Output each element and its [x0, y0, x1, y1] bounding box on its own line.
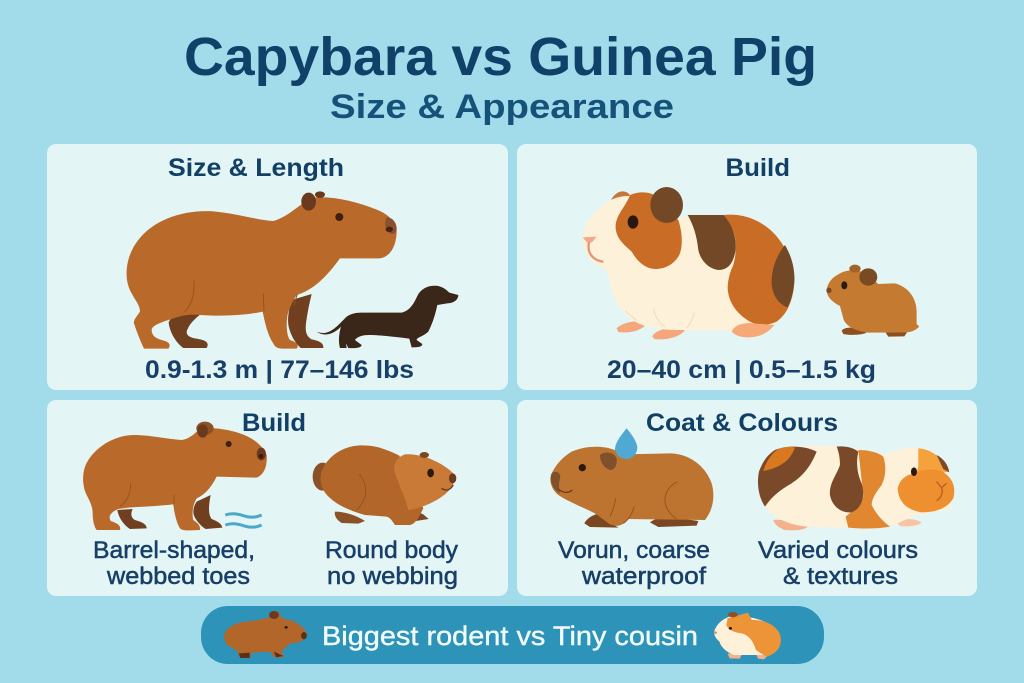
heading: build: Build — [726, 154, 790, 182]
label: no webbing: no webbing — [327, 563, 458, 590]
title: Capybara vs Guinea Pig — [184, 27, 817, 87]
panel: guinea pig build — [517, 144, 977, 390]
icon: banner guinea pig — [714, 612, 781, 659]
subtitle: Size & Appearance — [330, 88, 674, 126]
heading: coat and colours: Coat & Colours — [646, 409, 838, 437]
icon: brown coarse coat rodent — [550, 447, 713, 528]
panel: coat and colours — [517, 400, 977, 596]
icon: capybara with webbed toes — [83, 422, 267, 530]
label: varied colours: Varied colours — [758, 537, 918, 564]
label: barrel-shaped: Barrel-shaped, — [93, 537, 255, 564]
label: waterproof: waterproof — [581, 563, 706, 590]
icon: water drop — [615, 428, 637, 459]
label: coarse coat: Vorun, coarse — [558, 537, 710, 564]
heading: build: Build — [242, 409, 306, 437]
icon: small capybara — [826, 265, 919, 337]
label: textures: & textures — [783, 563, 898, 590]
icon: banner capybara — [224, 611, 307, 658]
icon: dachshund — [317, 286, 458, 348]
panel: build comparison — [47, 400, 508, 596]
label: webbed toes: webbed toes — [106, 563, 250, 590]
icon: round rodent — [313, 445, 456, 525]
stat: capybara size: 0.9-1.3 m | 77–146 lbs — [145, 356, 414, 384]
banner — [201, 606, 824, 664]
icon: large capybara — [127, 191, 397, 349]
panel: size and length — [47, 144, 508, 390]
icon: large guinea pig — [583, 187, 794, 339]
heading: size and length: Size & Length — [168, 154, 344, 182]
icon: multicoloured guinea pig — [758, 446, 954, 530]
icon: water waves — [225, 514, 262, 527]
banner text: Biggest rodent vs Tiny cousin — [322, 621, 698, 651]
stat: guinea pig size: 20–40 cm | 0.5–1.5 kg — [607, 356, 876, 384]
label: round body: Round body — [325, 537, 458, 564]
